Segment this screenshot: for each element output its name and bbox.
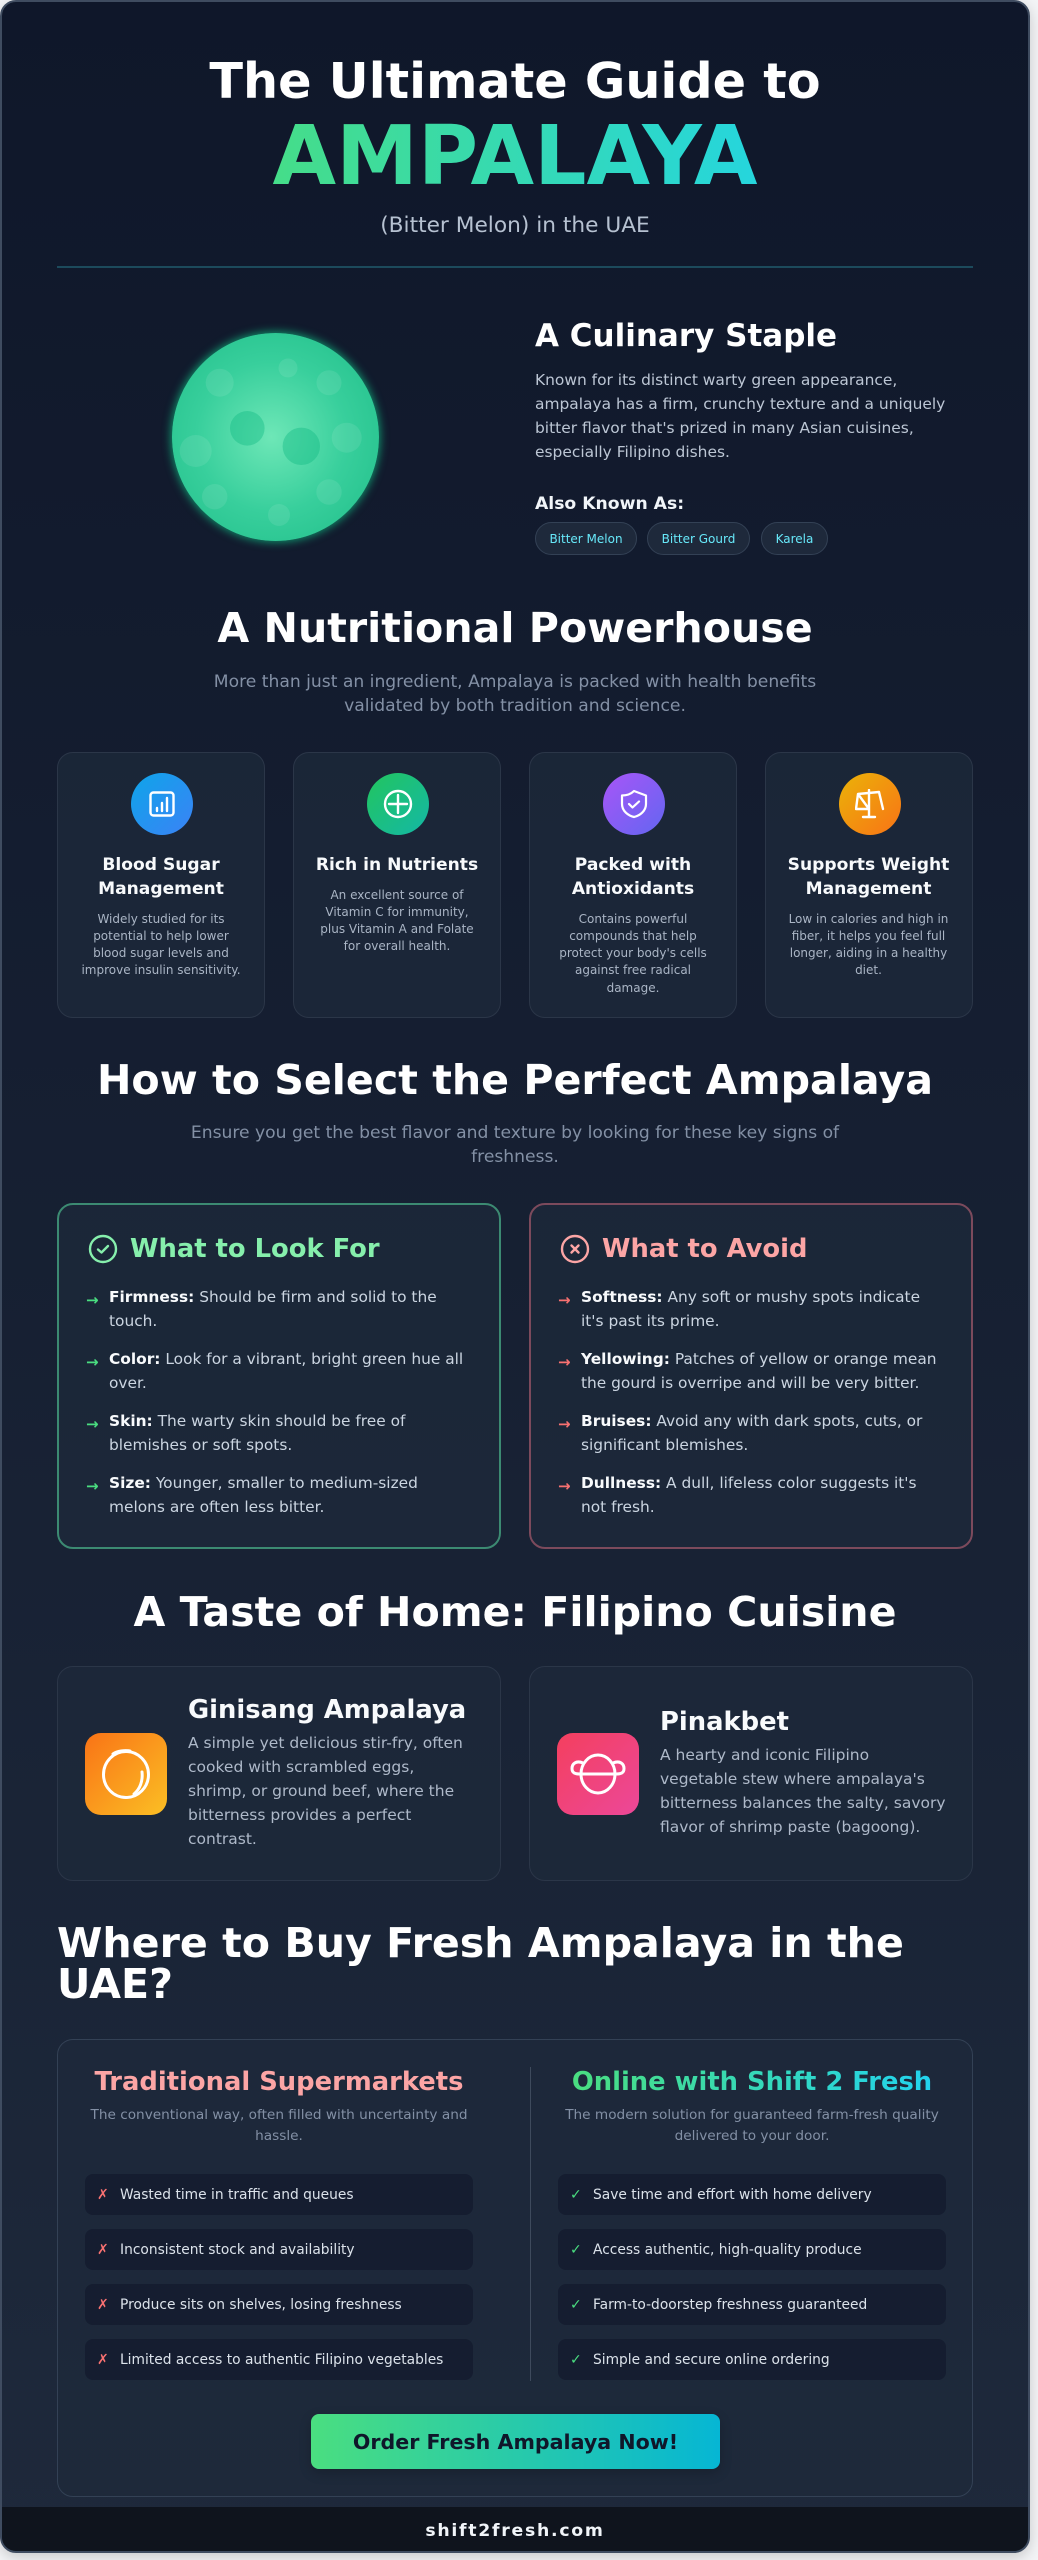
column text: online: delivered to your door. (675, 2128, 829, 2144)
card title: Packed with (575, 854, 691, 874)
subtitle: (Bitter Melon) in the UAE (380, 213, 650, 238)
card text (559, 912, 707, 995)
column text: traditional: The conventional way, often filled with uncertainty and (90, 2107, 468, 2123)
card text: cooked with scrambled eggs, (188, 1758, 414, 1776)
tag: bitter melon: Bitter Melon (549, 532, 623, 546)
list item: Access authentic, high-quality produce (593, 2242, 862, 2258)
list item: ✗ (97, 2187, 109, 2203)
panel: comparison (57, 2039, 973, 2497)
description (535, 371, 945, 461)
heading: nutritional powerhouse: A Nutritional Powerhouse (217, 604, 813, 652)
card title: Pinakbet (660, 1707, 789, 1737)
heading: where to buy: Where to Buy Fresh Ampalaya in the (57, 1918, 904, 1966)
list item (85, 2339, 473, 2380)
icon: egg (85, 1733, 167, 1815)
list item (558, 2229, 946, 2270)
checklist: look for: over. (109, 1374, 147, 1392)
footer: shift2fresh.com (425, 2520, 605, 2540)
heading: filipino cuisine: A Taste of Home: Filipino Cuisine (134, 1588, 896, 1636)
intro: how to select: Ensure you get the best flavor and texture by looking for these key signs of (191, 1122, 839, 1142)
card text: flavor of shrimp paste (bagoong). (660, 1818, 920, 1836)
card text: fiber, it helps you feel full (792, 929, 945, 943)
list item: Farm-to-doorstep freshness guaranteed (593, 2297, 867, 2313)
list item (85, 2229, 473, 2270)
checklist: look for: Size: Younger, smaller to medium-sized (109, 1474, 418, 1492)
icon: scales (838, 773, 900, 835)
list item: ✓ (570, 2242, 582, 2258)
button: order (311, 2414, 720, 2469)
icon: chart (131, 773, 193, 835)
intro: nutritional: validated by both tradition and science. (344, 696, 686, 716)
card title: Rich in Nutrients (316, 854, 478, 874)
icon: shield (603, 773, 665, 835)
footer (0, 2507, 1030, 2553)
intro: nutritional (214, 672, 816, 716)
list item: ✗ (97, 2352, 109, 2368)
card text: A simple yet delicious stir-fry, often (188, 1734, 463, 1752)
list item (85, 2174, 473, 2214)
tag: bitter gourd: Bitter Gourd (662, 532, 735, 546)
panel: culinary staple (535, 318, 945, 514)
list item: Limited access to authentic Filipino vegetables (120, 2352, 443, 2368)
card text: longer, aiding in a healthy (790, 946, 947, 960)
checklist: look for: blemishes or soft spots. (109, 1436, 292, 1454)
checklist: avoid: → (558, 1415, 571, 1433)
intro: nutritional: More than just an ingredient, Ampalaya is packed with health benefits (214, 672, 816, 692)
card text (660, 1746, 946, 1836)
card title: Ginisang Ampalaya (188, 1695, 466, 1725)
card text: diet. (855, 963, 882, 977)
card text: contrast. (188, 1830, 257, 1848)
list item: ✗ (97, 2297, 109, 2313)
checklist: avoid: not fresh. (581, 1498, 655, 1516)
tag: karela: Karela (776, 532, 813, 546)
button: order: Order Fresh Ampalaya Now! (353, 2430, 678, 2454)
card text: for overall health. (344, 939, 450, 953)
card text (320, 888, 474, 953)
heading: what to avoid: What to Avoid (602, 1234, 807, 1264)
card text: vegetable stew where ampalaya's (660, 1770, 925, 1788)
checklist: avoid (558, 1288, 937, 1516)
list item: Save time and effort with home delivery (593, 2187, 872, 2203)
card text: protect your body's cells (559, 946, 707, 960)
heading: where to buy (57, 1918, 904, 2008)
checklist: avoid: Bruises: Avoid any with dark spots, cuts, or (581, 1412, 922, 1430)
card text: against free radical (575, 963, 691, 977)
panel: what to avoid (529, 1203, 973, 1549)
card text (81, 912, 241, 977)
card text: plus Vitamin A and Folate (320, 922, 474, 936)
list item: Wasted time in traffic and queues (120, 2187, 354, 2203)
card text: shrimp, or ground beef, where the (188, 1782, 454, 1800)
tag: bitter gourd (647, 522, 750, 555)
description: Known for its distinct warty green appearance, (535, 371, 897, 389)
illustration: bitter melon (172, 333, 379, 541)
icon: check circle (88, 1234, 118, 1264)
icon: plus (367, 773, 429, 835)
column text: traditional: hassle. (255, 2128, 303, 2144)
card title: Antioxidants (572, 878, 694, 898)
checklist: avoid: → (558, 1477, 571, 1495)
card title: Management (806, 878, 931, 898)
card: rich in nutrients (293, 752, 501, 1018)
intro: how to select: freshness. (471, 1146, 559, 1166)
checklist: avoid: Dullness: A dull, lifeless color suggests it's (581, 1474, 917, 1492)
icon: pot (557, 1733, 639, 1815)
card title (572, 854, 694, 898)
card text: Vitamin C for immunity, (325, 905, 469, 919)
title: The Ultimate Guide to (209, 52, 821, 110)
checklist: look for: touch. (109, 1312, 157, 1330)
list item (558, 2174, 946, 2214)
column heading: traditional supermarkets: Traditional Supermarkets (94, 2067, 463, 2097)
column text: traditional (90, 2107, 468, 2144)
checklist: look for: → (86, 1291, 99, 1309)
list item: ✗ (97, 2242, 109, 2258)
card text: An excellent source of (330, 888, 464, 902)
checklist: look for: → (86, 1353, 99, 1371)
card: ginisang ampalaya (57, 1666, 501, 1881)
card text: Low in calories and high in (789, 912, 948, 926)
card: blood sugar management (57, 752, 265, 1018)
card text: Widely studied for its (97, 912, 225, 926)
card text (188, 1734, 463, 1848)
checklist: avoid: → (558, 1353, 571, 1371)
card text: blood sugar levels and (93, 946, 229, 960)
heading: a culinary staple: A Culinary Staple (535, 318, 837, 354)
card title (98, 854, 224, 898)
card: antioxidants (529, 752, 737, 1018)
list item (85, 2284, 473, 2324)
checklist: look for: → (86, 1477, 99, 1495)
list item: ✓ (570, 2352, 582, 2368)
card text: potential to help lower (93, 929, 229, 943)
list item: Produce sits on shelves, losing freshness (120, 2297, 402, 2313)
column text: online: The modern solution for guaranteed farm-fresh quality (565, 2107, 939, 2123)
heading: where to buy: UAE? (57, 1960, 173, 2008)
title highlight: Ampalaya: AMPALAYA (272, 109, 758, 204)
tag: bitter melon (535, 522, 637, 555)
checklist: avoid: → (558, 1291, 571, 1309)
card title: Management (98, 878, 224, 898)
card text: bitterness provides a perfect (188, 1806, 411, 1824)
checklist: look for: melons are often less bitter. (109, 1498, 324, 1516)
list item (558, 2339, 946, 2380)
card text (789, 912, 948, 977)
column heading: online: Online with Shift 2 Fresh (572, 2067, 932, 2097)
card text: damage. (607, 981, 659, 995)
icon: x circle (560, 1234, 590, 1264)
description: especially Filipino dishes. (535, 443, 730, 461)
checklist: avoid: significant blemishes. (581, 1436, 748, 1454)
checklist: look for (86, 1288, 463, 1516)
card text: compounds that help (569, 929, 697, 943)
card title: Blood Sugar (102, 854, 220, 874)
card: weight management (764, 752, 973, 1018)
checklist: avoid: Yellowing: Patches of yellow or orange mean (581, 1350, 937, 1368)
card title: Supports Weight (788, 854, 949, 874)
checklist: avoid: Softness: Any soft or mushy spots indicate (581, 1288, 920, 1306)
card text: bitterness balances the salty, savory (660, 1794, 946, 1812)
list item: ✓ (570, 2297, 582, 2313)
card text: A hearty and iconic Filipino (660, 1746, 869, 1764)
heading: how to select: How to Select the Perfect Ampalaya (97, 1056, 933, 1104)
heading: what to look for: What to Look For (130, 1234, 380, 1264)
checklist: look for: Color: Look for a vibrant, bright green hue all (109, 1350, 463, 1368)
list item (558, 2284, 946, 2324)
intro: how to select (191, 1122, 840, 1166)
column text: online (565, 2107, 939, 2144)
list item: Simple and secure online ordering (593, 2352, 830, 2368)
card title (788, 854, 949, 898)
card text: improve insulin sensitivity. (81, 963, 241, 977)
checklist: look for: Skin: The warty skin should be free of (109, 1412, 405, 1430)
checklist: look for: Firmness: Should be firm and solid to the (109, 1288, 437, 1306)
tag: karela (761, 522, 828, 555)
list item: ✓ (570, 2187, 582, 2203)
card text: Contains powerful (579, 912, 687, 926)
checklist: avoid: the gourd is overripe and will be very bitter. (581, 1374, 919, 1392)
list item: Inconsistent stock and availability (120, 2242, 355, 2258)
description: ampalaya has a firm, crunchy texture and a uniquely (535, 395, 945, 413)
checklist: avoid: it's past its prime. (581, 1312, 720, 1330)
heading: also known as: Also Known As: (535, 494, 684, 514)
card: pinakbet (529, 1666, 973, 1881)
description: bitter flavor that's prized in many Asian cuisines, (535, 419, 914, 437)
checklist: look for: → (86, 1415, 99, 1433)
panel: what to look for (57, 1203, 501, 1549)
